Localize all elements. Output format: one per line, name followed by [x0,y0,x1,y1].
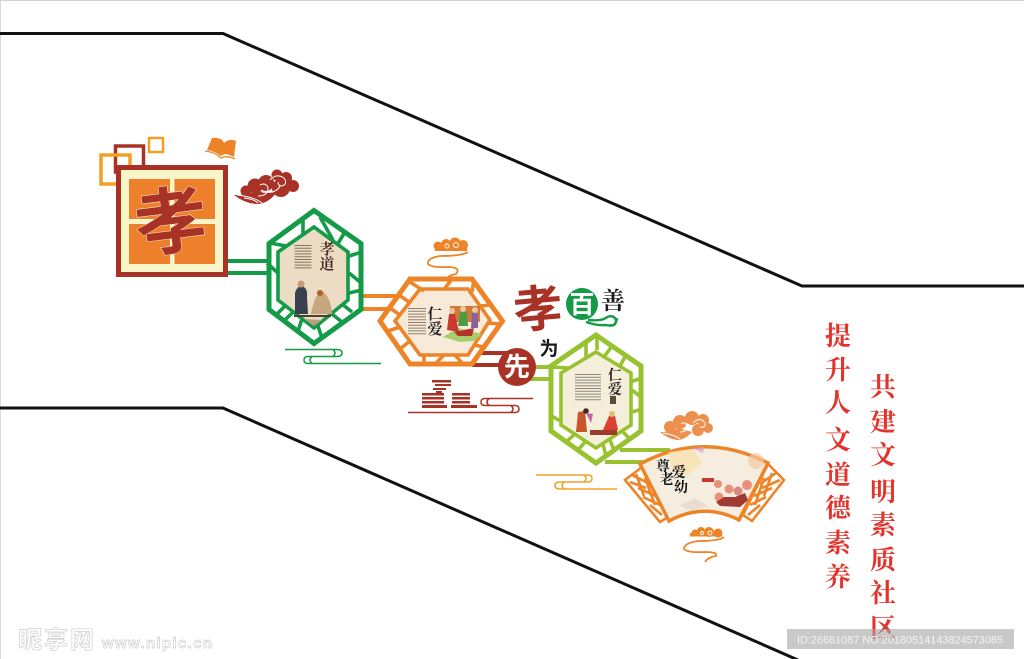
connectors: brown [472,353,510,365]
decorative squares [101,138,163,184]
watermark: site logo [18,627,212,654]
title: 仁爱: 爱 [426,320,443,338]
title: 仁爱 [607,367,622,398]
watermark: image id bar [787,629,1014,649]
title: 孝道: 道 [319,255,335,273]
panel: lime hexagon 仁爱 [550,335,642,463]
watermark: image id bar: ID:26661087 NO:20180514143824573085 [797,634,1003,646]
heading: 孝 为 先: 先 [504,352,530,382]
watermark: site logo: www.nipic.cn [101,635,212,652]
slogan: 提升人文道德素养 [825,321,853,592]
title: 孝道: 孝 [319,240,335,258]
slogan: 提升人文道德素养: 升 [825,356,851,385]
icon: brown stacked books [422,380,477,408]
watermark: site logo: 昵享网 [18,627,96,654]
text block [294,245,312,270]
title: 孝道 [319,240,335,273]
slogan: 提升人文道德素养: 素 [825,529,851,558]
slogan: 共建文明素质社区: 文 [870,441,896,470]
illustration: figures [294,280,332,326]
panel: fan 尊老爱幼 [625,447,784,522]
slogan: 提升人文道德素养: 德 [825,494,853,523]
icon: open book [205,138,236,159]
slogan: 共建文明素质社区: 质 [870,546,896,575]
upper wall line [0,34,1024,286]
title: 仁爱: 仁 [427,306,443,323]
illustration: children [714,480,752,507]
slogan: 共建文明素质社区 [870,373,897,643]
text block [575,374,601,402]
heading: 孝 为 先 [498,281,565,386]
decoration: orange scroll lines [536,475,617,489]
illustration: figures [576,396,618,435]
slogan: 提升人文道德素养: 提 [825,321,851,351]
connectors: orange [362,296,396,309]
panel: green hexagon 孝道 [267,210,362,344]
slogan: 提升人文道德素养: 养 [825,563,851,592]
slogan: 共建文明素质社区: 共 [870,373,897,402]
fan lattice right [743,464,784,521]
fan title: 尊老爱幼: 老 [660,471,674,488]
slogan: 共建文明素质社区: 区 [870,614,896,643]
slogan: 共建文明素质社区: 素 [870,511,896,540]
slogan: 提升人文道德素养: 道 [825,461,851,490]
decoration: brown scroll lines [408,398,533,412]
icon: brown cloud [234,170,299,204]
icon: orange cloud above fan [660,411,713,440]
title: 仁爱 [426,306,443,338]
heading: 孝 为 先: 孝 [511,281,565,339]
lower wall line [0,408,798,659]
main 孝 square panel [118,168,226,274]
slogan: 提升人文道德素养: 文 [825,426,851,455]
icon: orange cloud below fan [684,527,724,562]
heading: 孝: 孝 [131,179,212,267]
fan painting wash [668,447,764,511]
fan title: 尊老爱幼 [656,458,688,496]
connectors: lime [530,367,670,462]
title: 仁爱: 仁 [608,367,622,384]
fan title: 尊老爱幼: 尊 [656,458,670,475]
heading: 孝 为 先: 为 [539,338,559,360]
slogan: 共建文明素质社区: 建 [870,408,896,437]
decoration: green scroll lines [285,350,381,364]
slogan: 共建文明素质社区: 社 [870,579,896,608]
slogan: 共建文明素质社区: 明 [870,478,896,507]
badge: 百善: 善 [601,288,625,315]
fan title: 尊老爱幼: 爱 [671,464,686,481]
panel: orange hexagon 仁爱 [380,279,502,364]
fan lattice left [625,467,668,522]
badge: 百善: 百 [569,291,595,319]
icon: orange cloud with tail above orange hexagon [428,238,468,277]
fan title: 尊老爱幼: 幼 [674,479,688,496]
connectors: green [226,261,268,273]
slogan: 提升人文道德素养: 人 [825,389,851,418]
badge: 百善 [566,288,625,326]
text block [408,308,426,335]
title: 仁爱: 爱 [607,381,622,398]
illustration: family scene [443,306,482,342]
